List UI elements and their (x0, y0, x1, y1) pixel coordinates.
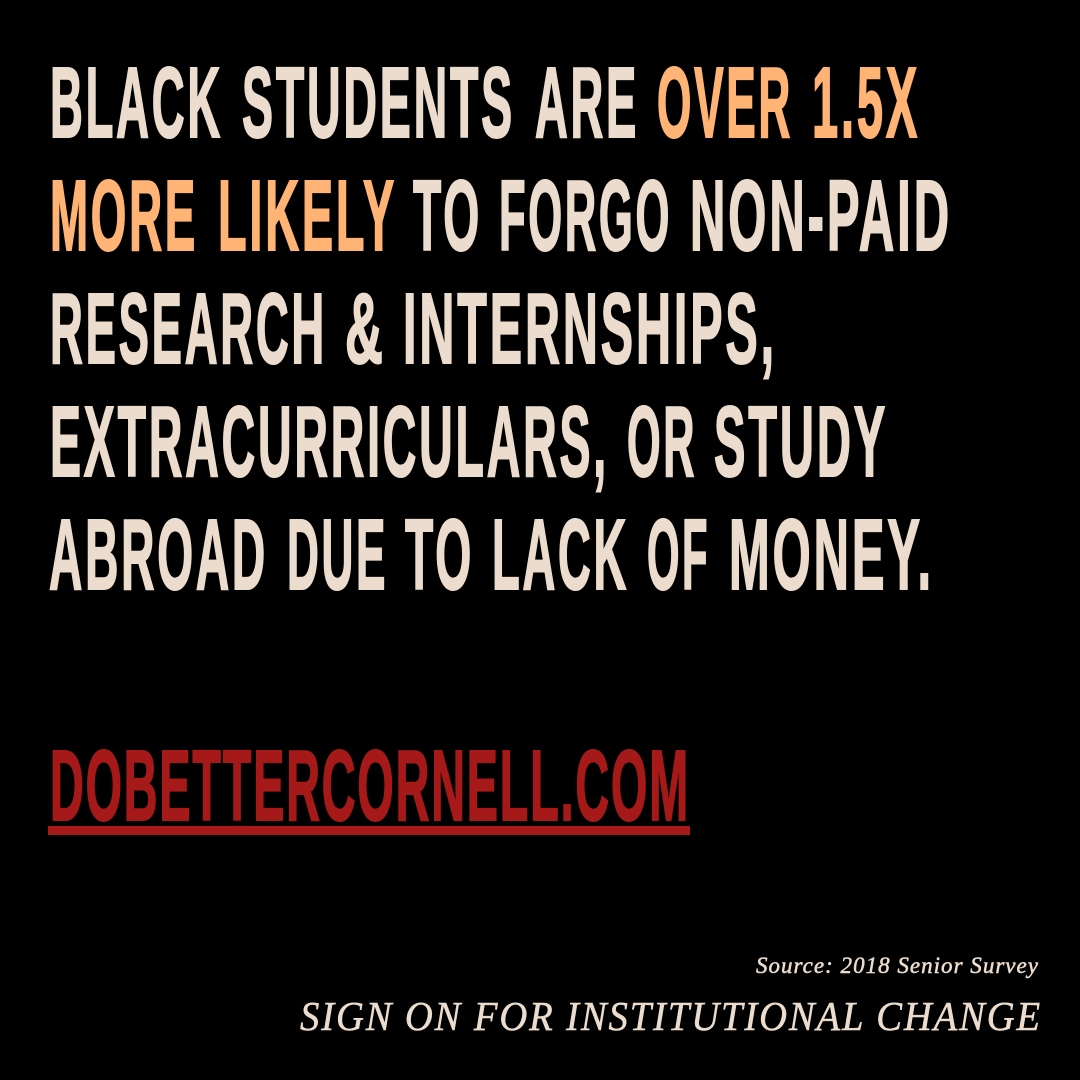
headline statistic: OVER (657, 47, 793, 159)
headline statistic: ABROAD (49, 499, 268, 611)
headline statistic: STUDENTS (242, 47, 515, 159)
headline statistic: LACK (492, 499, 629, 611)
headline statistic: LIKELY (218, 160, 397, 272)
headline statistic: TO (405, 499, 474, 611)
headline statistic: OF (647, 499, 710, 611)
headline statistic: & (345, 273, 386, 385)
headline statistic: TO (413, 160, 482, 272)
headline statistic: 1.5X (812, 47, 920, 159)
headline statistic: DUE (287, 499, 388, 611)
headline statistic: FORGO (499, 160, 672, 272)
call to action: SIGN ON FOR INSTITUTIONAL CHANGE (300, 993, 1042, 1039)
headline statistic: MORE (50, 160, 198, 272)
source note: Source: 2018 Senior Survey (756, 953, 1039, 978)
headline statistic: BLACK (50, 47, 223, 159)
headline statistic: STUDY (714, 386, 888, 498)
headline statistic: OR (627, 386, 697, 498)
headline statistic: ARE (535, 47, 639, 159)
website link (48, 730, 690, 842)
headline statistic: RESEARCH (50, 273, 327, 385)
headline statistic (49, 47, 952, 611)
